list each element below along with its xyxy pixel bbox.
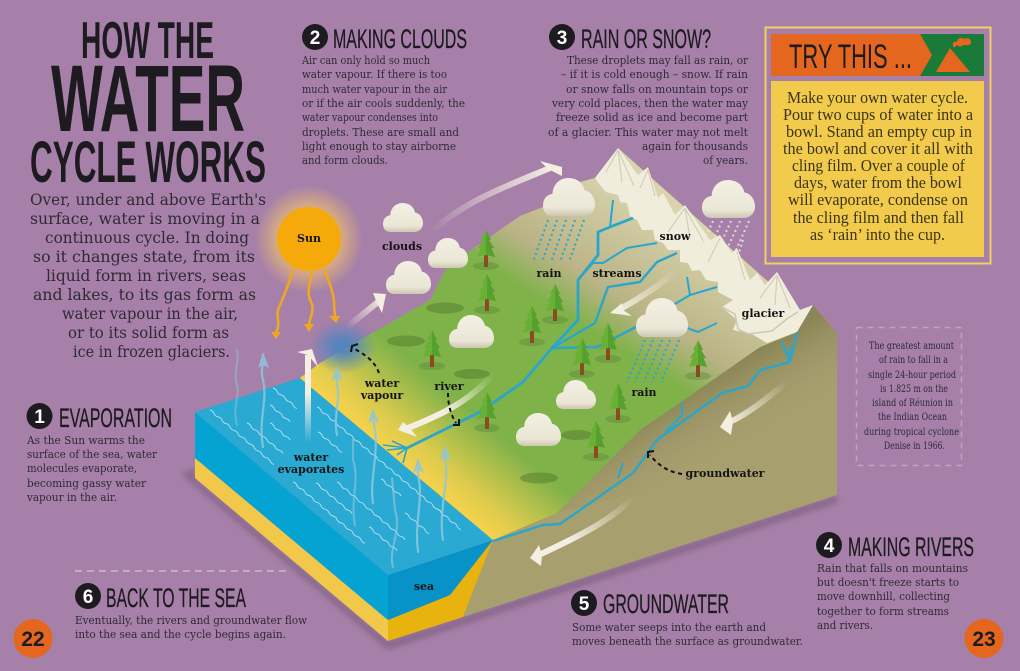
diagram labels: glacier bbox=[742, 307, 785, 320]
title bbox=[30, 12, 266, 195]
intro text block: or to its solid form as bbox=[68, 323, 229, 342]
step 5: groundwater: 5 bbox=[579, 594, 590, 615]
diagram labels: water bbox=[293, 451, 328, 464]
diagram labels: sea bbox=[414, 580, 434, 593]
callout: greatest rainfall bbox=[856, 328, 962, 466]
step 1: evaporation: As the Sun warms the bbox=[26, 433, 145, 447]
step 4: making rivers: 4 bbox=[824, 536, 835, 557]
step 5: groundwater: Some water seeps into the earth and bbox=[572, 620, 767, 634]
page number 22: 22 bbox=[21, 628, 45, 651]
try this text: the bowl and cover it all with bbox=[783, 139, 974, 158]
diagram labels: river bbox=[434, 380, 464, 393]
step 3: rain or snow bbox=[548, 24, 749, 167]
step 6: back to the sea: into the sea and the cycle begins again. bbox=[75, 627, 286, 641]
arrow: vapour rising to clouds bbox=[347, 293, 386, 327]
arrow: clouds moving over land bbox=[430, 161, 562, 233]
arrow: groundwater to sea bbox=[530, 498, 633, 566]
callout: greatest rainfall: Denise in 1966. bbox=[884, 440, 945, 452]
diagram labels: clouds bbox=[382, 240, 422, 253]
step 2: making clouds: water vapour condenses into bbox=[302, 110, 438, 124]
step 5: groundwater: GROUNDWATER bbox=[603, 589, 729, 619]
step 3: rain or snow: of a glacier. This water may not melt bbox=[548, 125, 748, 139]
step 6: back to the sea: Eventually, the rivers and groundwater flow bbox=[75, 613, 307, 627]
cloud shadows bbox=[387, 302, 593, 484]
step 2: making clouds bbox=[301, 24, 467, 167]
intro text block: ice in frozen glaciers. bbox=[73, 342, 230, 361]
step 1: evaporation: vapour in the air. bbox=[26, 490, 117, 504]
step 2: making clouds: or if the air cools suddenly, the bbox=[302, 96, 465, 110]
rain over the mountains bbox=[693, 221, 749, 272]
rain bbox=[533, 220, 679, 382]
step 4: making rivers: move downhill, collecting bbox=[817, 589, 951, 603]
try this text: as ‘rain’ into the cup. bbox=[810, 225, 945, 244]
diagram labels: evaporates bbox=[278, 463, 344, 476]
water cycle diagram bbox=[181, 148, 837, 650]
try this text: will evaporate, condense on bbox=[788, 190, 968, 209]
step 3: rain or snow: again for thousands bbox=[642, 139, 748, 153]
step 5: groundwater: moves beneath the surface as groundwater. bbox=[572, 634, 803, 648]
diagram labels: rain bbox=[631, 386, 657, 399]
sun: Sun bbox=[297, 232, 321, 245]
intro text block: surface, water is moving in a bbox=[30, 209, 260, 228]
arrow: river flow to sea bbox=[398, 375, 493, 437]
diagram labels: rain bbox=[536, 267, 562, 280]
page number 22 bbox=[14, 619, 52, 658]
step 2: making clouds: much water vapour in the air bbox=[302, 82, 447, 96]
clouds bbox=[383, 178, 755, 446]
intro text block bbox=[30, 190, 266, 361]
diagram labels: vapour bbox=[360, 389, 403, 402]
arrow: water evaporating upward bbox=[297, 349, 318, 443]
intro text block: liquid form in rivers, seas bbox=[46, 266, 246, 285]
title: HOW THE bbox=[81, 12, 214, 70]
step 1: evaporation: surface of the sea, water bbox=[27, 447, 157, 461]
dashed pointer: river bbox=[448, 393, 459, 425]
step 1: evaporation: becoming gassy water bbox=[27, 476, 146, 490]
title: WATER bbox=[51, 46, 245, 152]
white cycle arrows bbox=[297, 161, 787, 566]
step 2: making clouds: 2 bbox=[310, 28, 320, 49]
step 3: rain or snow: or snow falls on mountain tops or bbox=[566, 82, 748, 96]
step 6: back to the sea: 6 bbox=[83, 587, 93, 608]
step 6: back to the sea bbox=[75, 571, 307, 641]
step 2: making clouds: water vapour. If there is too bbox=[302, 67, 447, 81]
sea block bbox=[195, 378, 493, 641]
step 2: making clouds: MAKING CLOUDS bbox=[333, 24, 467, 54]
page number 23 bbox=[964, 619, 1004, 658]
try this text bbox=[771, 81, 984, 257]
diagram labels: water bbox=[364, 377, 399, 390]
try this text: Pour two cups of water into a bbox=[783, 105, 974, 124]
diagram labels: groundwater bbox=[686, 467, 765, 480]
try this text: bowl. Stand an empty cup in bbox=[786, 122, 972, 141]
step 4: making rivers: but doesn't freeze starts to bbox=[817, 575, 959, 589]
step 1: evaporation: molecules evaporate, bbox=[27, 461, 137, 475]
evaporation arrows bbox=[235, 350, 451, 567]
side shading bbox=[557, 305, 837, 513]
step 3: rain or snow: of years. bbox=[703, 153, 748, 167]
intro text block: so it changes state, from its bbox=[33, 247, 255, 266]
intro text block: and lakes, to its gas form as bbox=[33, 285, 256, 304]
step 1: evaporation: EVAPORATION bbox=[59, 403, 172, 433]
rivers bbox=[383, 200, 797, 541]
intro text block: continuous cycle. In doing bbox=[45, 228, 249, 247]
panel: try this bbox=[766, 28, 990, 264]
try this banner: TRY THIS ... bbox=[789, 38, 912, 76]
sun bbox=[255, 185, 363, 339]
step 3: rain or snow: very cold places, then the water may bbox=[551, 96, 748, 110]
diagram labels: snow bbox=[660, 230, 691, 243]
dashed pointer: water vapour bbox=[351, 344, 379, 373]
sea waves bbox=[210, 388, 461, 551]
step 3: rain or snow: RAIN OR SNOW? bbox=[581, 24, 711, 54]
step 2: making clouds: and form clouds. bbox=[302, 153, 388, 167]
try this text: the cling film and then fall bbox=[793, 208, 964, 227]
snow caps bbox=[595, 148, 813, 343]
step 4: making rivers: together to form streams bbox=[817, 604, 949, 618]
page number 23: 23 bbox=[972, 628, 996, 651]
try this text: cling film. Over a couple of bbox=[792, 156, 965, 175]
try this text: Make your own water cycle. bbox=[787, 88, 968, 107]
step 3: rain or snow: These droplets may fall as rain, or bbox=[567, 53, 748, 67]
ground shadow under block bbox=[181, 468, 837, 650]
callout: greatest rainfall: single 24-hour period bbox=[868, 369, 956, 381]
water vapour glow bbox=[309, 320, 377, 374]
arrow: downhill over land bbox=[610, 270, 677, 316]
callout: greatest rainfall: is 1.825 m on the bbox=[880, 383, 948, 395]
trees bbox=[419, 230, 711, 461]
step 3: rain or snow: freeze solid as ice and become part bbox=[556, 110, 748, 124]
title: CYCLE WORKS bbox=[30, 130, 266, 195]
diagram labels bbox=[278, 230, 785, 593]
step 1: evaporation bbox=[26, 403, 172, 504]
intro text block: Over, under and above Earth's bbox=[30, 190, 266, 209]
step 4: making rivers bbox=[816, 532, 974, 632]
step 3: rain or snow: 3 bbox=[557, 28, 567, 49]
arrow: mountain groundwater bbox=[720, 382, 787, 435]
callout: greatest rainfall: during tropical cyclone bbox=[864, 426, 959, 438]
diagram labels: streams bbox=[592, 267, 642, 280]
step 2: making clouds: Air can only hold so much bbox=[301, 53, 430, 67]
callout: greatest rainfall: island of Réunion in bbox=[872, 397, 953, 409]
step 2: making clouds: droplets. These are small and bbox=[302, 125, 460, 139]
land top bbox=[300, 148, 800, 540]
step 5: groundwater bbox=[571, 589, 803, 648]
callout: greatest rainfall: the Indian Ocean bbox=[878, 411, 947, 423]
callout: greatest rainfall: The greatest amount bbox=[869, 340, 955, 352]
step 6: back to the sea: BACK TO THE SEA bbox=[106, 583, 246, 613]
dashed pointer: groundwater bbox=[648, 451, 682, 474]
step 1: evaporation: 1 bbox=[34, 407, 45, 428]
step 2: making clouds: light enough to stay airborne bbox=[302, 139, 456, 153]
step 4: making rivers: Rain that falls on mountains bbox=[817, 561, 968, 575]
intro text block: water vapour in the air, bbox=[62, 304, 238, 323]
step 3: rain or snow: – if it is cold enough – snow. If rain bbox=[561, 67, 749, 81]
land side face bbox=[463, 305, 837, 617]
step 4: making rivers: and rivers. bbox=[817, 618, 873, 632]
try this text: days, water from the bowl bbox=[794, 173, 962, 192]
callout: greatest rainfall: of rain to fall in a bbox=[879, 354, 948, 366]
